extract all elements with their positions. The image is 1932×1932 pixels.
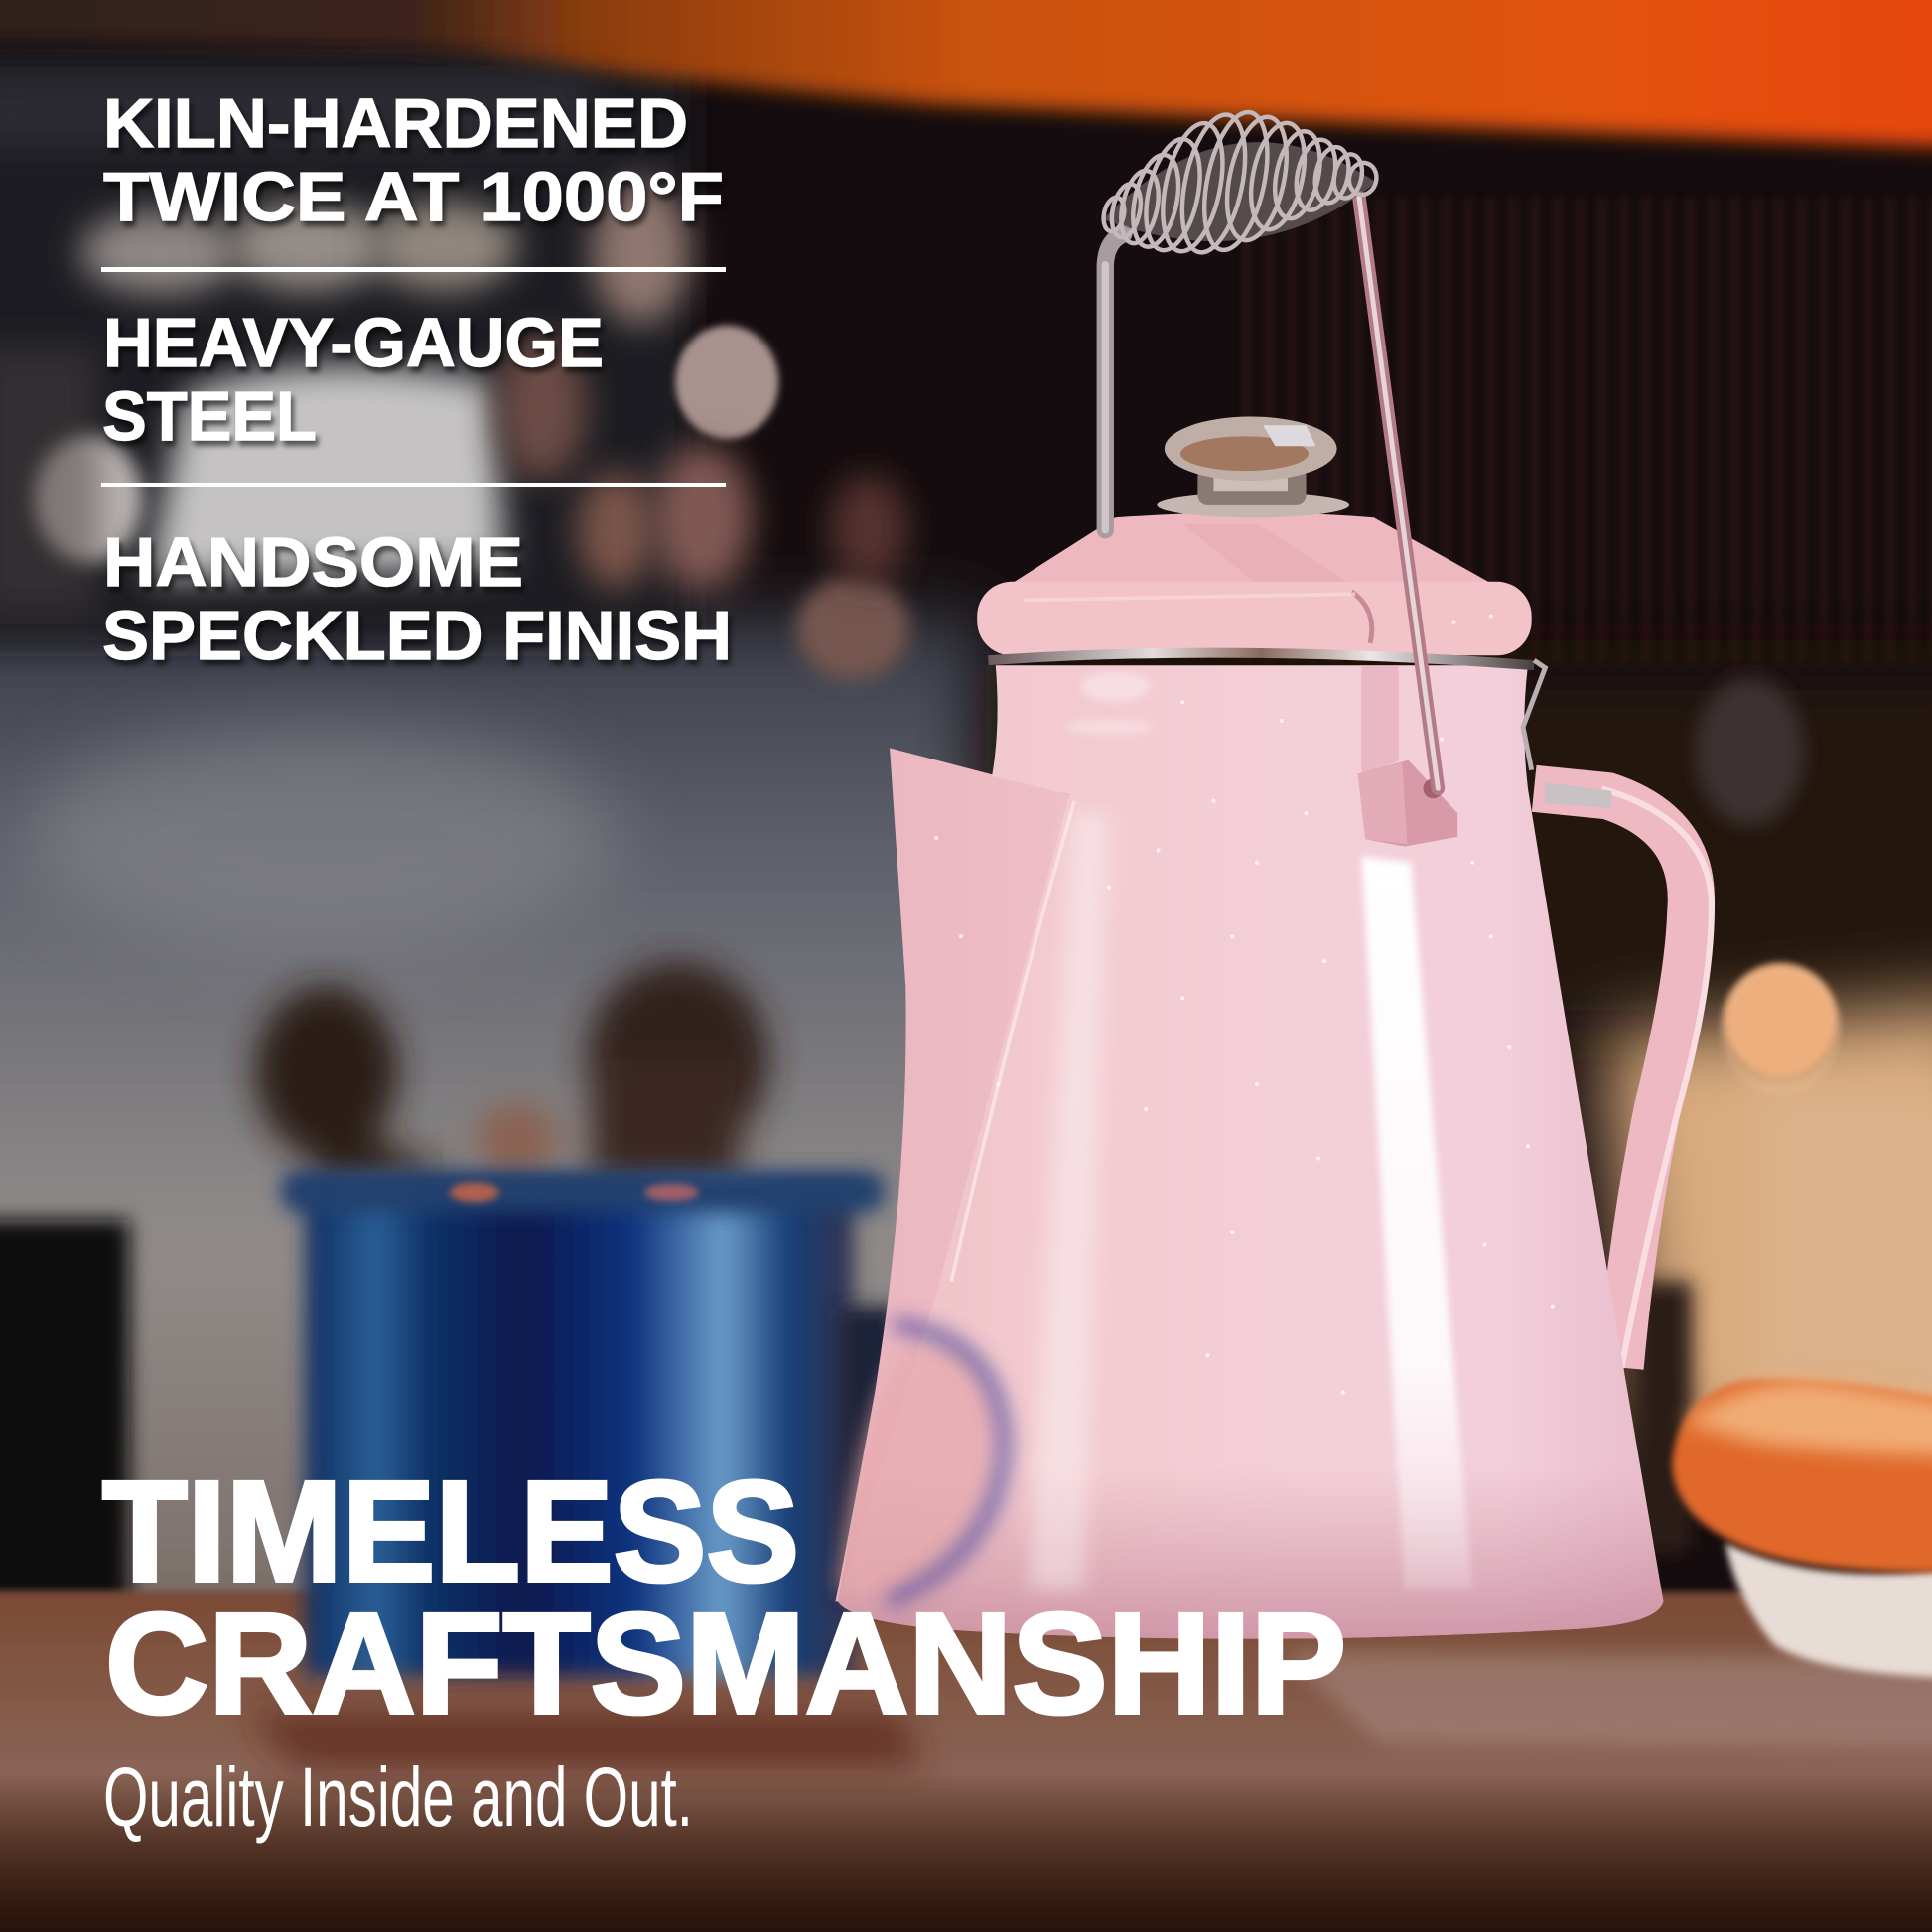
table reflection	[1282, 1651, 1932, 1749]
feature list	[101, 84, 732, 674]
feature: heavy-gauge steel: HEAVY-GAUGE	[103, 304, 604, 381]
pastry on a white plate	[1672, 1380, 1932, 1678]
lower body shade	[838, 1466, 1663, 1639]
feature: speckled finish: HANDSOME	[103, 523, 523, 601]
coffee pot	[835, 106, 1712, 1639]
wire bail handle	[1105, 198, 1438, 788]
feature: heavy-gauge steel	[102, 304, 604, 455]
subtitle: Quality Inside and Out.	[103, 1750, 693, 1844]
pot body	[838, 665, 1663, 1639]
glass knob	[1157, 416, 1349, 517]
spout crease	[951, 801, 1074, 1282]
spring grip	[1101, 106, 1379, 258]
mug shadow on the table	[246, 1713, 924, 1768]
feature: speckled finish: SPECKLED FINISH	[102, 597, 732, 674]
blue enamel mug	[281, 1171, 899, 1676]
feature: speckled finish	[102, 523, 732, 674]
divider two	[101, 483, 726, 487]
background: black object at far left	[0, 1220, 129, 1601]
background: dark utensils in the cup	[255, 961, 768, 1182]
silver rim	[988, 653, 1534, 665]
feature: kiln-hardened	[103, 84, 724, 235]
hinge lug	[1358, 760, 1457, 847]
title: CRAFTSMANSHIP	[105, 1584, 1346, 1743]
spout	[835, 748, 1084, 1601]
blurred mug handle in front	[838, 1324, 1004, 1601]
title: TIMELESS	[102, 1451, 799, 1611]
feature: heavy-gauge steel: STEEL	[102, 377, 317, 455]
handle	[1534, 782, 1712, 1368]
bottom vignette	[0, 1774, 1932, 1932]
divider one	[101, 267, 726, 272]
title	[102, 1451, 1346, 1743]
lid	[977, 512, 1532, 655]
feature: kiln-hardened: TWICE AT 1000°F	[103, 158, 724, 235]
enamel speckles	[934, 615, 1555, 1394]
feature: kiln-hardened: KILN-HARDENED	[103, 84, 688, 162]
background: bokeh lights	[0, 73, 909, 949]
wooden table	[0, 1592, 1932, 1932]
soft body highlights	[1029, 665, 1472, 1589]
